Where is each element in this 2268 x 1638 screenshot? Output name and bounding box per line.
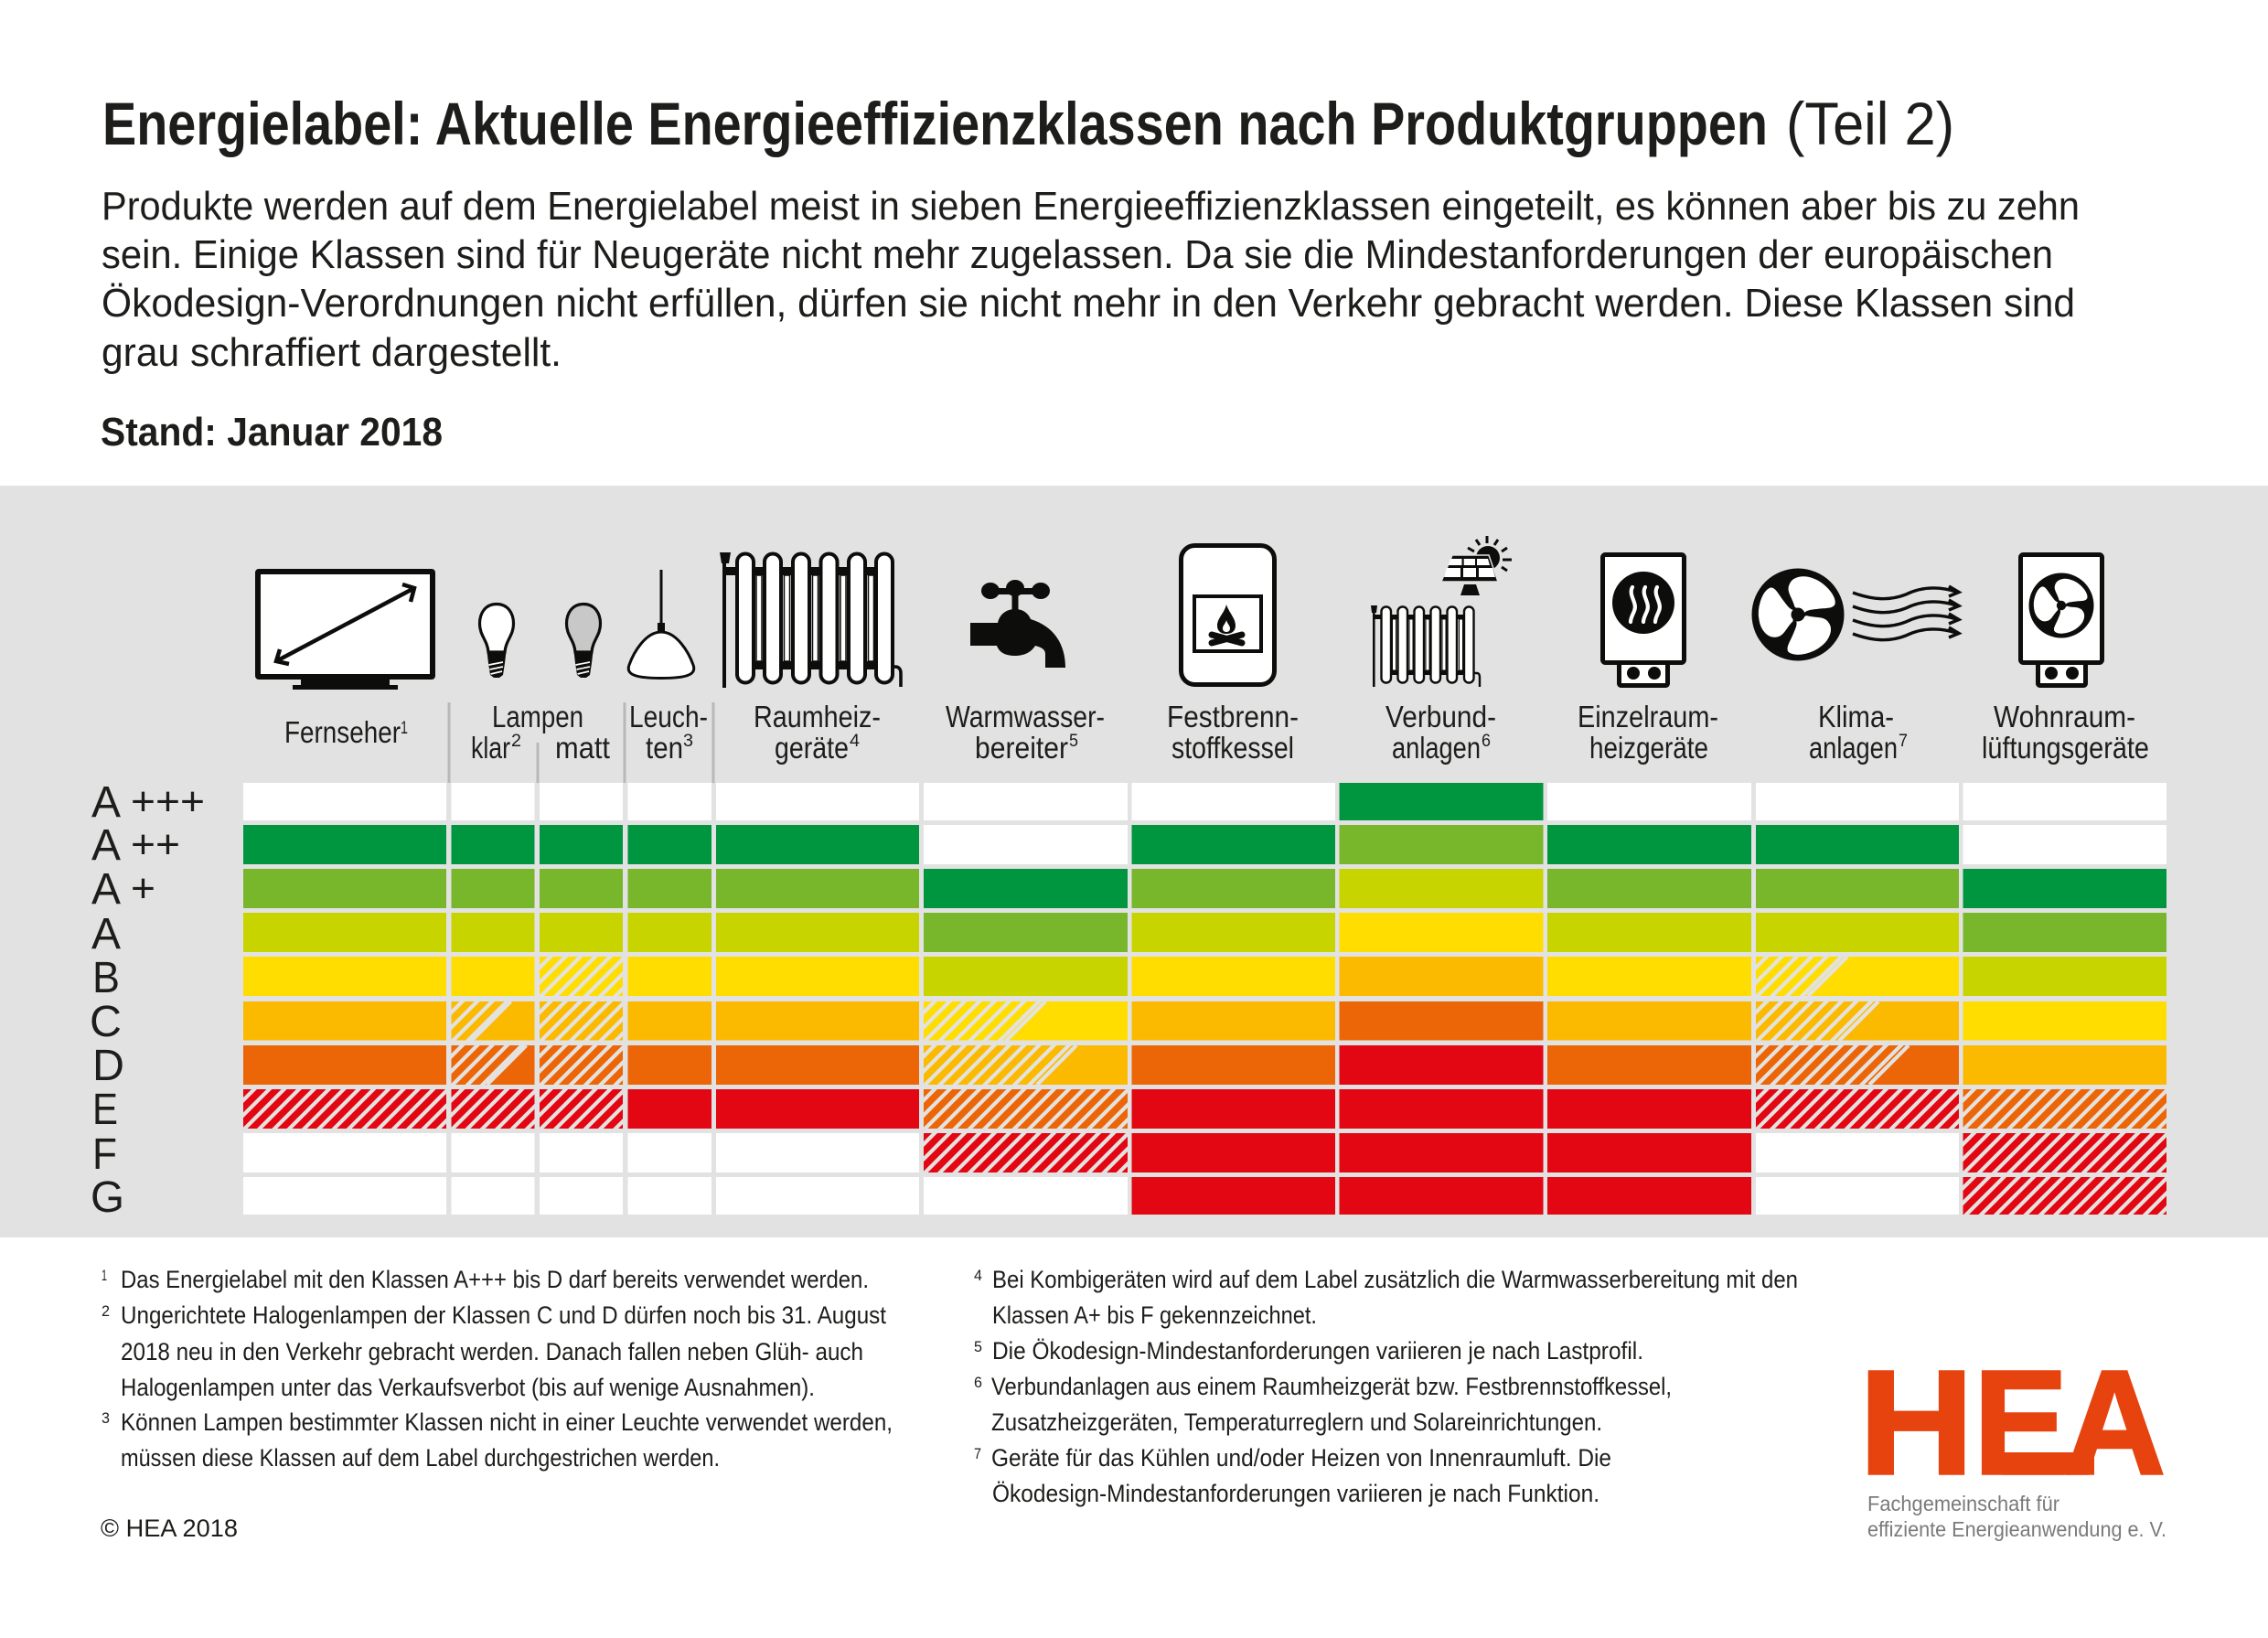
icon: pendant lamp	[628, 570, 694, 679]
row labels: energy classes: ++	[131, 822, 180, 867]
icon: television	[258, 572, 433, 690]
footnotes: left column: 2018 neu in den Verkehr gebracht werden. Danach fallen neben Glüh- auch	[121, 1338, 863, 1365]
footnotes: left column: 2	[102, 1302, 110, 1320]
icon: small radiator	[1371, 605, 1480, 687]
column: Wohnraumlüftungsgeräte	[1931, 783, 2214, 1220]
label: Leuchten	[629, 700, 708, 765]
column: Festbrennstoffkessel	[1132, 783, 1335, 1215]
intro text: grau schraffiert dargestellt.	[102, 330, 562, 375]
footnotes: right column: Klassen A+ bis F gekennzeichnet.	[992, 1301, 1317, 1329]
logo: HEA: E	[1974, 1340, 2068, 1505]
label: Lampen klar / matt: 2	[511, 732, 521, 751]
row labels: energy classes: A	[91, 778, 121, 827]
label: Verbundanlagen: anlagen	[1392, 731, 1481, 765]
footnotes: right column: Zusatzheizgeräten, Temperaturreglern und Solareinrichtungen.	[991, 1408, 1602, 1436]
footnotes: right column: Verbundanlagen aus einem Raumheizgerät bzw. Festbrennstoffkessel,	[991, 1373, 1672, 1400]
label: Raumheizgeräte: geräte	[775, 731, 849, 765]
row labels: energy classes	[90, 778, 205, 1222]
label: Festbrennstoffkessel: Festbrenn-	[1167, 700, 1299, 733]
row labels: energy classes: +	[131, 866, 155, 911]
icon: solid fuel boiler	[1182, 545, 1275, 684]
label: Verbundanlagen	[1385, 700, 1496, 765]
footnotes: right column: Geräte für das Kühlen und/oder Heizen von Innenraumluft. Die	[991, 1444, 1611, 1472]
label: Raumheizgeräte: 4	[850, 732, 860, 751]
copyright: © HEA 2018	[101, 1515, 238, 1542]
label: Leuchten: 3	[683, 732, 693, 751]
footnotes: right column: 4	[974, 1267, 982, 1284]
label: Klimaanlagen: anlagen	[1809, 731, 1898, 765]
logo: HEA: H	[1859, 1340, 1974, 1505]
footnotes: left column	[102, 1266, 893, 1472]
label: Lampen klar / matt: klar	[471, 731, 510, 765]
footnotes: right column: 5	[974, 1338, 982, 1355]
footnotes: right column: Bei Kombigeräten wird auf dem Label zusätzlich die Warmwasserbereitung mit den	[992, 1266, 1798, 1293]
intro text: Produkte werden auf dem Energielabel meist in sieben Energieeffizienzklassen eingeteilt, es können aber bis zu zehn	[102, 184, 2080, 229]
icon: frosted bulb	[567, 604, 600, 678]
label: Verbundanlagen: 6	[1482, 732, 1491, 751]
icon: water tap	[970, 580, 1065, 668]
label: Raumheizgeräte: Raumheiz-	[754, 700, 881, 733]
label: Lampen klar / matt: matt	[555, 731, 610, 765]
label: Warmwasserbereiter: bereiter	[975, 731, 1068, 765]
row labels: energy classes: B	[92, 954, 120, 1002]
column: Leuchten	[627, 783, 711, 1215]
intro text: Ökodesign-Verordnungen nicht erfüllen, dürfen sie nicht mehr in den Verkehr gebracht werden. Diese Klassen sind	[102, 281, 2075, 326]
icon: radiator	[720, 552, 901, 688]
label: Einzelraumheizgeräte	[1578, 700, 1718, 765]
row labels: energy classes: A	[91, 910, 121, 958]
label: Festbrennstoffkessel	[1167, 700, 1299, 765]
label: Einzelraumheizgeräte: heizgeräte	[1589, 731, 1708, 765]
icon: fan with air flow	[1748, 569, 1959, 665]
label: Warmwasserbereiter	[946, 700, 1105, 765]
logo: HEA: A	[2063, 1340, 2166, 1505]
label: Lampen klar / matt	[471, 700, 610, 765]
row labels: energy classes: D	[92, 1042, 124, 1090]
label: Wohnraumlüftungsgeräte	[1982, 700, 2149, 765]
label: Verbundanlagen: Verbund-	[1385, 700, 1496, 733]
column: Klimaanlagen	[1724, 783, 2007, 1215]
row labels: energy classes: A	[91, 865, 121, 914]
intro text: sein. Einige Klassen sind für Neugeräte nicht mehr zugelassen. Da sie die Mindestanforderungen der europäischen	[102, 232, 2053, 277]
label: Fernseher: 1	[401, 719, 408, 738]
column: Lampen matt	[508, 783, 791, 1215]
icon: ventilation unit	[2021, 554, 2102, 686]
row labels: energy classes: C	[90, 998, 122, 1046]
title: Energielabel: Aktuelle Energieeffizienzklassen nach Produktgruppen	[102, 90, 1768, 157]
column: Warmwasserbereiter	[892, 783, 1175, 1215]
footnotes: right column: 6	[974, 1374, 982, 1391]
panel: energy class chart	[0, 486, 2268, 1237]
column: Lampen klar	[419, 783, 702, 1215]
date note: Stand: Januar 2018	[101, 410, 443, 455]
footnotes: left column: müssen diese Klassen auf dem Label durchgestrichen werden.	[121, 1444, 720, 1472]
icon: clear bulb	[479, 604, 514, 678]
label: Raumheizgeräte	[754, 700, 881, 765]
footnotes: right column: Ökodesign-Mindestanforderungen variieren je nach Funktion.	[992, 1480, 1599, 1507]
label: Klimaanlagen: 7	[1899, 732, 1908, 751]
footnotes: left column: Ungerichtete Halogenlampen der Klassen C und D dürfen noch bis 31. August	[121, 1301, 886, 1329]
footnotes: right column	[974, 1266, 1798, 1507]
row labels: energy classes: E	[92, 1086, 118, 1134]
label: Klimaanlagen	[1809, 700, 1908, 765]
label: Leuchten: Leuch-	[629, 700, 708, 733]
icon: single room heater	[1602, 554, 1685, 686]
label: Klimaanlagen: Klima-	[1818, 700, 1894, 733]
label: Warmwasserbereiter: 5	[1069, 732, 1078, 751]
footnotes: right column: Die Ökodesign-Mindestanforderungen variieren je nach Lastprofil.	[992, 1337, 1643, 1365]
logo: HEA: effiziente Energieanwendung e. V.	[1867, 1517, 2166, 1541]
footnotes: left column: Das Energielabel mit den Klassen A+++ bis D darf bereits verwendet werden.	[121, 1266, 869, 1293]
footnotes: left column: 3	[102, 1409, 110, 1427]
row labels: energy classes: A	[91, 821, 121, 870]
label: Wohnraumlüftungsgeräte: lüftungsgeräte	[1982, 731, 2149, 765]
label: Wohnraumlüftungsgeräte: Wohnraum-	[1994, 700, 2135, 733]
row labels: energy classes: +++	[131, 779, 205, 824]
column: Einzelraumheizgeräte	[1547, 783, 1751, 1215]
label: Fernseher: Fernseher	[284, 715, 401, 749]
label: Lampen klar / matt: Lampen	[492, 700, 583, 733]
label: Einzelraumheizgeräte: Einzelraum-	[1578, 700, 1718, 733]
label: Leuchten: ten	[646, 731, 683, 765]
logo: HEA	[1859, 1340, 2166, 1541]
column: Verbundanlagen	[1339, 783, 1544, 1215]
footnotes: left column: 1	[102, 1267, 107, 1284]
label: Warmwasserbereiter: Warmwasser-	[946, 700, 1105, 733]
row labels: energy classes: G	[91, 1173, 124, 1222]
column: Fernseher	[211, 783, 495, 1215]
column: Raumheizgeräte	[716, 783, 919, 1215]
icon: solar panel with sun	[1441, 536, 1512, 595]
logo: HEA: Fachgemeinschaft für	[1867, 1492, 2059, 1515]
row labels: energy classes: F	[92, 1130, 117, 1179]
title: (Teil 2)	[1786, 90, 1954, 157]
footnotes: left column: Halogenlampen unter das Verkaufsverbot (bis auf wenige Ausnahmen).	[121, 1374, 815, 1401]
intro text	[102, 184, 2080, 375]
label: Festbrennstoffkessel: stoffkessel	[1171, 731, 1294, 765]
footnotes: right column: 7	[974, 1445, 981, 1462]
footnotes: left column: Können Lampen bestimmter Klassen nicht in einer Leuchte verwendet werden,	[121, 1408, 893, 1436]
